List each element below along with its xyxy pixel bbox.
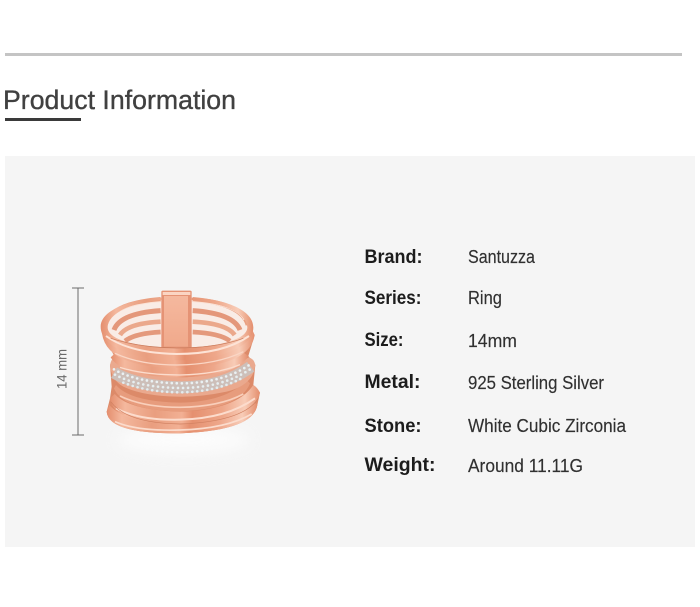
- ring floor reflection: [117, 427, 250, 453]
- ring illustration: [101, 291, 260, 453]
- dimension marker: 14 mm: 14 mm: [54, 349, 70, 389]
- pave band: [110, 357, 255, 397]
- second ring: [102, 325, 255, 368]
- panel: product details background: [5, 156, 695, 547]
- row: Series: Ring: [468, 288, 502, 308]
- row: Metal: [364, 372, 604, 393]
- heading: Product Information: Product Information: [3, 85, 236, 115]
- row: Weight: Around 11.11G: [468, 456, 583, 476]
- band above pave: [111, 350, 248, 377]
- interior and back bands: [103, 298, 250, 352]
- top ring rim: [101, 298, 253, 360]
- row: Brand: Santuzza: [468, 247, 536, 267]
- row: Series: Series:: [364, 288, 422, 309]
- row: Stone: White Cubic Zirconia: [468, 416, 627, 436]
- row: Size: [364, 330, 517, 351]
- ring photo with dimension marker: [54, 288, 260, 453]
- rectangular bar: [161, 291, 192, 348]
- row: Weight: [364, 455, 583, 476]
- row: Size: 14mm: [468, 331, 517, 351]
- specification list: [364, 247, 627, 476]
- row: Weight: Weight:: [364, 455, 436, 476]
- row: Stone: [364, 416, 627, 437]
- top divider line: [5, 53, 682, 56]
- row: Size: Size:: [364, 330, 404, 351]
- row: Stone: Stone:: [364, 416, 422, 437]
- bottom band: [107, 402, 257, 433]
- row: Series: [364, 288, 502, 309]
- fourth band: [110, 385, 260, 424]
- solid silhouette behind bands: [102, 327, 260, 433]
- lower thin band: [114, 380, 250, 411]
- row: Metal: Metal:: [364, 372, 420, 393]
- row: Brand: [364, 247, 536, 268]
- dimension marker: 14 mm: [54, 288, 84, 435]
- row: Brand: Brand:: [364, 247, 422, 268]
- row: Metal: 925 Sterling Silver: [468, 373, 604, 393]
